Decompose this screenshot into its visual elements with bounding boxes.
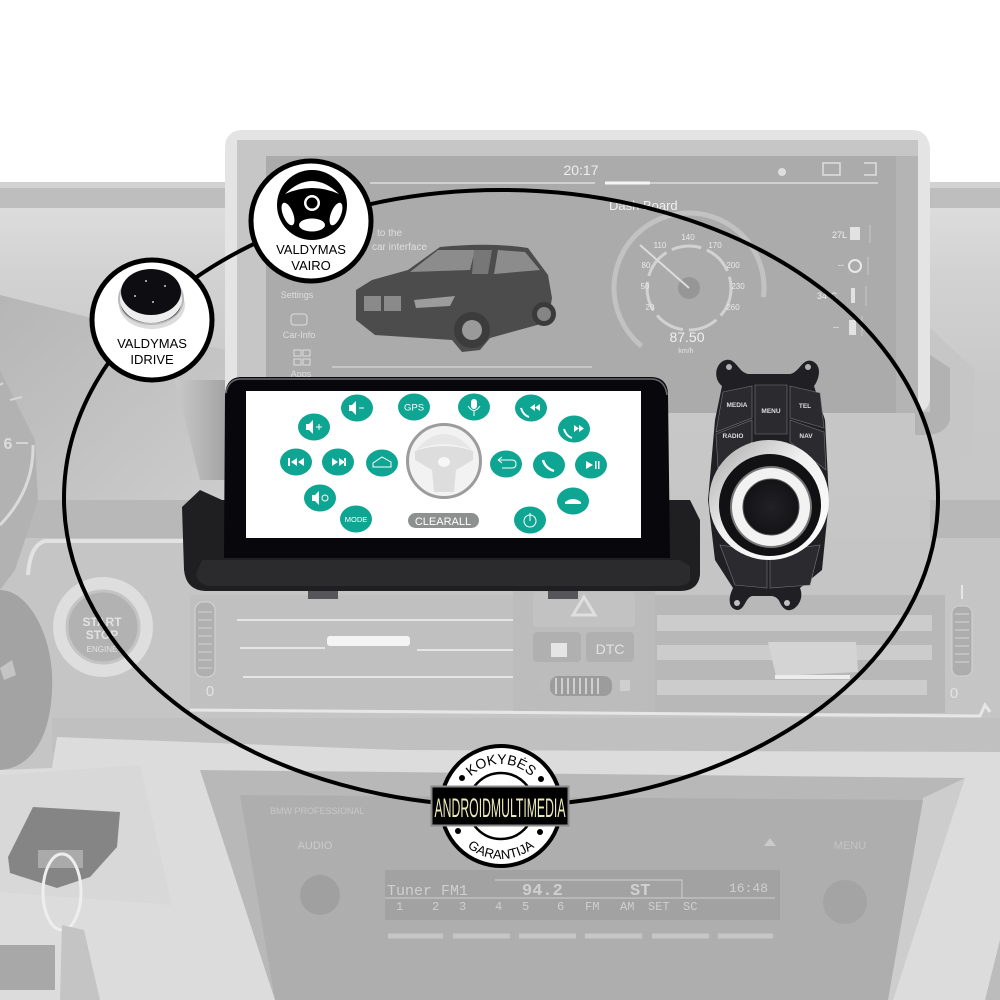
icon: steering wheel	[277, 170, 347, 240]
seal text: kokybes: KOKYBĖS	[466, 754, 536, 776]
idrive controller	[708, 360, 829, 610]
touchscreen panel	[246, 391, 641, 538]
idrive controller: OPTION	[780, 571, 805, 578]
badge: idrive control	[92, 260, 212, 380]
button glyphs	[288, 399, 600, 527]
idrive controller: MENU	[761, 408, 781, 415]
monitor suv image	[356, 228, 556, 352]
radio head unit: FM	[585, 900, 599, 914]
monitor dashboard gauge: 230	[731, 282, 745, 291]
monitor dashboard gauge	[583, 182, 795, 394]
badge: steering wheel control	[251, 161, 371, 281]
monitor status chips: --	[838, 260, 844, 270]
monitor dashboard gauge: 20	[646, 303, 655, 312]
monitor dashboard gauge: km/h	[678, 348, 694, 355]
left air vent	[190, 595, 515, 710]
monitor status chips: 27L	[832, 230, 847, 240]
monitor dashboard gauge: 140	[681, 233, 695, 242]
right air vent: 0	[950, 685, 958, 702]
key slot and key	[0, 765, 172, 1000]
radio head unit: BMW PROFESSIONAL	[270, 806, 365, 816]
monitor side menu: Car-Info	[283, 330, 315, 340]
left air vent: 0	[206, 683, 214, 700]
radio head unit: 1	[396, 900, 403, 914]
radio head unit: 4	[495, 900, 502, 914]
monitor dashboard gauge: 200	[726, 261, 740, 270]
idrive controller: MEDIA	[727, 402, 748, 409]
monitor status bar: 20:17	[563, 162, 599, 178]
monitor suv image: to the	[377, 228, 402, 239]
radio head unit: SC	[683, 900, 697, 914]
radio head unit: 6	[557, 900, 564, 914]
monitor side menu	[281, 290, 315, 379]
idrive controller: RADIO	[723, 433, 743, 440]
radio head unit: MENU	[834, 840, 866, 852]
monitor suv image: car interface	[372, 242, 427, 253]
seal text: garantija: GARANTIJA	[469, 842, 535, 860]
idrive controller: TEL	[799, 403, 811, 410]
background: mounted monitor	[225, 130, 930, 413]
radio head unit: Tuner FM1	[387, 883, 468, 900]
monitor status chips: --	[833, 322, 839, 332]
radio head unit: 16:48	[729, 881, 768, 896]
radio head unit: AM	[620, 900, 634, 914]
monitor status chips: 34°C	[817, 291, 838, 301]
monitor dashboard gauge: 87.50	[669, 329, 705, 345]
label: valdymas vairo: VALDYMAS	[276, 242, 346, 257]
monitor dashboard gauge: 260	[726, 303, 740, 312]
head unit with cradle	[182, 377, 700, 599]
start stop button: ENGINE	[87, 645, 117, 654]
monitor dashboard gauge: 80	[642, 261, 651, 270]
centre console switches: DTC	[596, 641, 624, 657]
idrive controller: BACK	[734, 570, 753, 577]
start stop button: STOP	[86, 628, 118, 642]
button glyphs: GPS	[404, 402, 424, 414]
monitor side menu: Settings	[281, 290, 314, 300]
radio head unit: AUDIO	[298, 840, 333, 852]
instrument cluster edge: 6	[4, 436, 13, 453]
monitor dashboard gauge: 50	[641, 282, 650, 291]
text: ANDROIDMULTIMEDIA	[434, 793, 566, 823]
quality guarantee seal	[430, 744, 570, 868]
label: valdymas idrive: IDRIVE	[130, 352, 174, 367]
idrive controller: NAV	[799, 433, 813, 440]
control area ellipse outline	[64, 190, 938, 806]
monitor status chips	[817, 225, 870, 336]
radio head unit: 2	[432, 900, 439, 914]
start stop button: START	[82, 615, 122, 629]
monitor status bar	[370, 162, 878, 183]
clear all button	[408, 513, 479, 528]
radio head unit: 94.2	[522, 882, 563, 901]
right air vent	[655, 585, 972, 713]
radio head unit: 5	[522, 900, 529, 914]
label: valdymas vairo: VAIRO	[291, 258, 331, 273]
steering wheel image	[408, 424, 480, 498]
monitor side menu: Apps	[291, 369, 312, 379]
button glyphs: MODE	[345, 515, 367, 524]
monitor dashboard gauge: 170	[708, 241, 722, 250]
start stop button	[53, 577, 153, 677]
centre console switches	[513, 590, 655, 714]
label: valdymas idrive: VALDYMAS	[117, 336, 187, 351]
instrument cluster edge	[0, 370, 38, 590]
clear all button: CLEARALL	[415, 516, 471, 528]
icon: idrive knob	[118, 269, 185, 329]
radio head unit: SET	[648, 900, 670, 914]
monitor dashboard gauge: 110	[654, 241, 667, 250]
radio head unit: ST	[630, 882, 650, 901]
radio head unit: 3	[459, 900, 466, 914]
radio head unit	[200, 770, 965, 1000]
monitor dashboard gauge: Dash Board	[609, 198, 678, 213]
